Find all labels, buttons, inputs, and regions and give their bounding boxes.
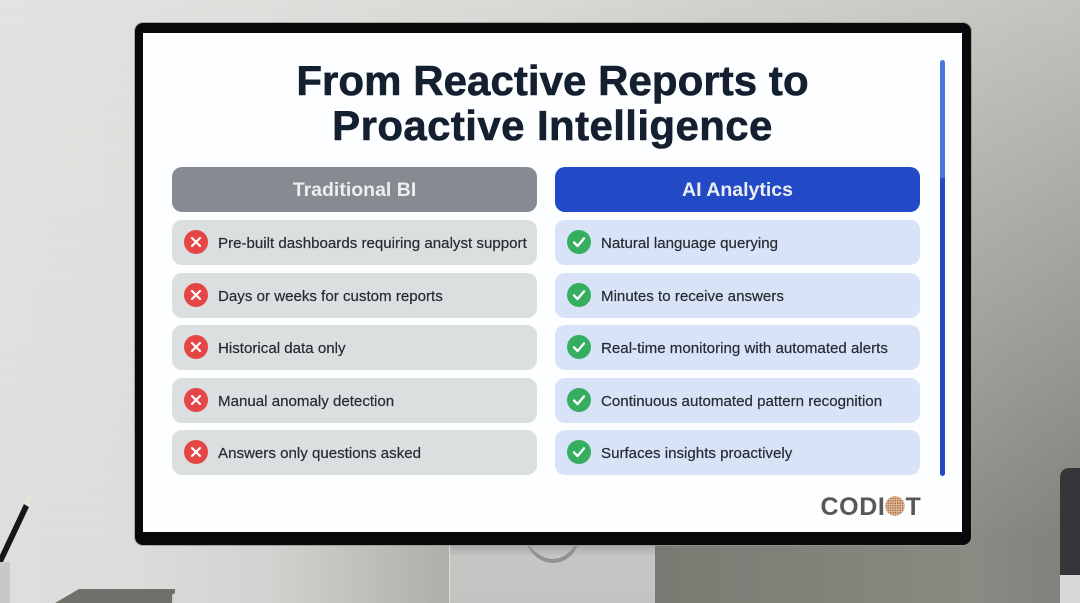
monitor stand	[449, 545, 655, 603]
row: real-time	[555, 325, 920, 370]
heading: AI Analytics: AI Analytics	[682, 179, 793, 201]
row: pre-built dashboards	[172, 220, 537, 265]
row: days or weeks	[172, 273, 537, 318]
logo: CODIOT: T	[906, 493, 921, 521]
row: natural language: Natural language querying	[601, 235, 778, 252]
row: manual anomaly	[172, 378, 537, 423]
row: historical data	[172, 325, 537, 370]
heading: AI Analytics	[555, 167, 920, 212]
row: days or weeks: Days or weeks for custom reports	[218, 288, 443, 305]
row: pre-built dashboards: Pre-built dashboards requiring analyst support	[218, 235, 527, 252]
heading: Traditional BI: Traditional BI	[293, 179, 416, 201]
row: natural language	[555, 220, 920, 265]
logo: CODIOT	[820, 493, 921, 521]
logo: CODIOT: CODI	[820, 493, 885, 521]
title: From Reactive Reports to	[296, 57, 809, 104]
title	[296, 57, 809, 149]
row: answers only	[172, 430, 537, 475]
pencil cup with pencil	[0, 494, 32, 603]
row: manual anomaly: Manual anomaly detection	[218, 393, 394, 410]
row: minutes	[555, 273, 920, 318]
row: answers only: Answers only questions asked	[218, 445, 421, 462]
title: Proactive Intelligence	[332, 102, 773, 149]
row: surfaces	[555, 430, 920, 475]
row: surfaces: Surfaces insights proactively	[601, 445, 792, 462]
row: minutes: Minutes to receive answers	[601, 288, 784, 305]
heading: Traditional BI	[172, 167, 537, 212]
monitor screen	[143, 33, 962, 532]
monitor frame	[135, 23, 971, 545]
row: continuous: Continuous automated pattern recognition	[601, 393, 882, 410]
dark object at right edge	[1060, 468, 1080, 603]
scrollbar accent	[940, 60, 945, 476]
row: real-time: Real-time monitoring with automated alerts	[601, 340, 888, 357]
row: continuous	[555, 378, 920, 423]
book on desk	[55, 589, 175, 603]
row: historical data: Historical data only	[218, 340, 346, 357]
